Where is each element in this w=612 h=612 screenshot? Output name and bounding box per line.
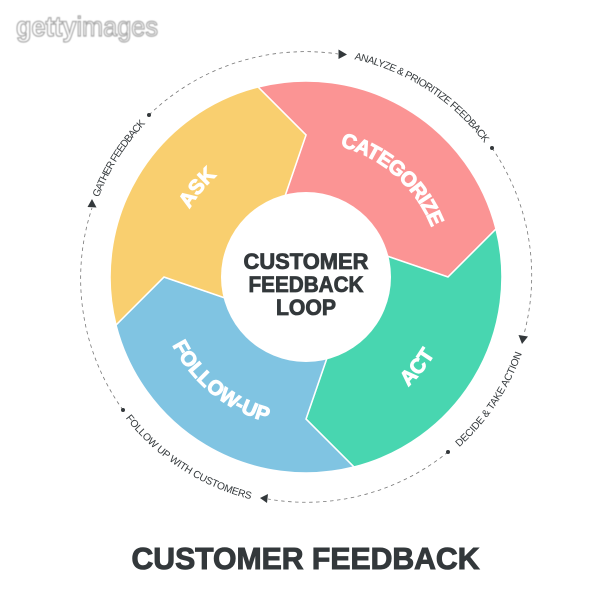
caption: decide and take action: DECIDE & TAKE ACTION <box>455 352 522 447</box>
outer cycle arrow: follow up to gather <box>81 199 125 412</box>
label: follow-up: FOLLOW-UP <box>172 338 270 420</box>
segment: act <box>306 229 502 467</box>
outer cycle arrow: analyze to decide <box>490 146 532 344</box>
label: categorize: CATEGORIZE <box>342 134 445 228</box>
watermark: gettyimages: gettyimages <box>16 11 158 42</box>
center heading: LOOP <box>276 295 336 320</box>
center heading: CUSTOMER <box>244 249 369 274</box>
outer cycle arrow: decide to follow up <box>260 450 450 503</box>
segment: ask <box>110 87 306 325</box>
center heading: FEEDBACK <box>248 272 364 297</box>
label: act: ACT <box>402 346 433 388</box>
caption: analyze and prioritize feedback: ANALYZE & PRIORITIZE FEEDBACK <box>354 53 490 143</box>
segment: follow-up <box>116 277 354 473</box>
title: CUSTOMER FEEDBACK <box>132 541 480 576</box>
caption: follow up with customers: FOLLOW UP WITH CUSTOMERS <box>126 414 252 499</box>
caption: gather feedback: GATHER FEEDBACK <box>93 119 146 196</box>
center circle <box>221 192 391 362</box>
label: ask: ASK <box>180 164 218 210</box>
outer cycle arrow: gather to analyze <box>147 50 347 117</box>
center heading <box>244 249 369 320</box>
segment: categorize <box>258 81 496 277</box>
